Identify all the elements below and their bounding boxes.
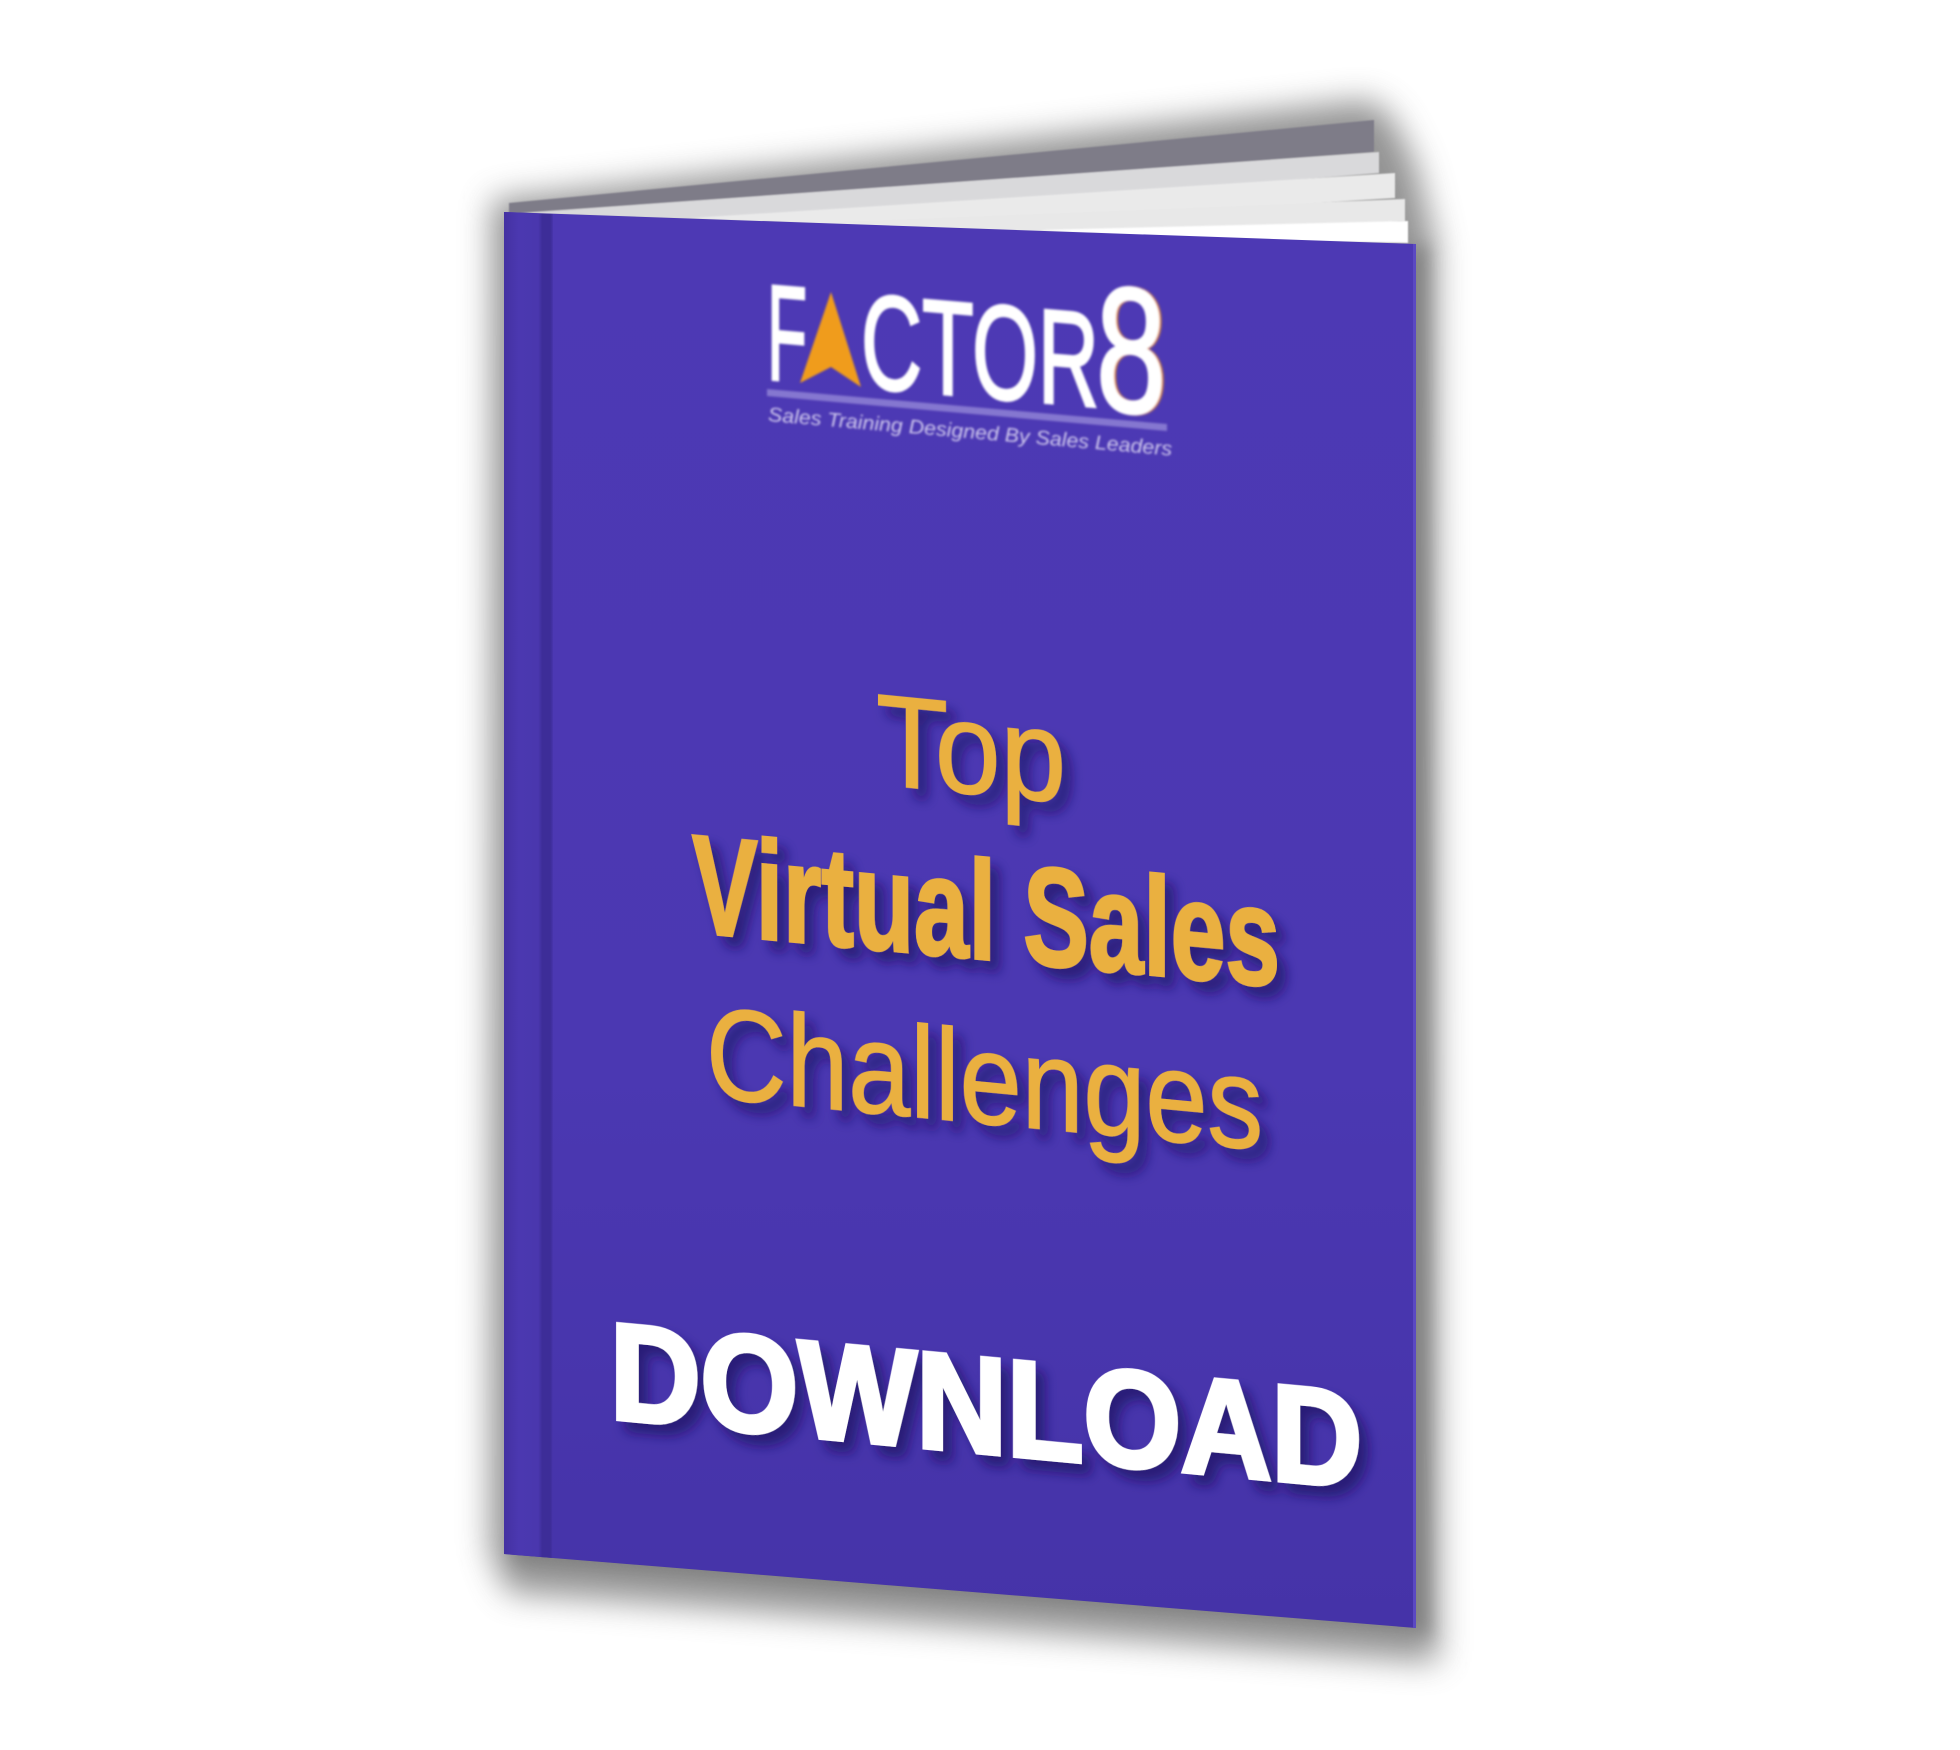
logo numeral 8: 8 — [1096, 248, 1166, 453]
logo letters CTOR: CTOR — [861, 266, 1099, 436]
logo: Factor8: F — [767, 256, 807, 411]
download label: DOWNLOAD — [610, 1295, 1362, 1518]
logo rule — [767, 389, 1167, 431]
logo: Factor8 — [767, 248, 1172, 461]
book shadow — [490, 100, 1438, 1662]
book pages — [509, 120, 1408, 243]
logo tagline: Sales Training Designed By Sales Leaders — [768, 404, 1172, 461]
book cover — [504, 212, 1416, 1628]
right edge highlight — [1413, 244, 1416, 1628]
spine — [504, 212, 553, 1558]
title line: Top: Top — [876, 666, 1066, 831]
title line: Virtual Sales: Virtual Sales — [692, 805, 1280, 1016]
logo arrow — [800, 292, 861, 387]
title: Top Virtual Sales Challenges — [692, 666, 1280, 1178]
title line: Challenges: Challenges — [706, 979, 1263, 1178]
